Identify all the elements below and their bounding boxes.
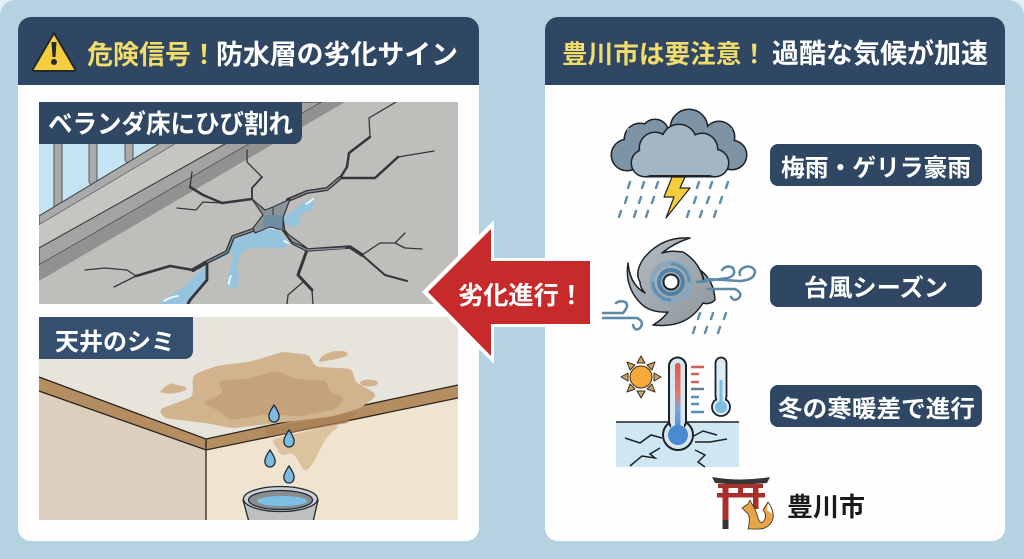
label: ceiling stain: 天井のシミ xyxy=(55,329,175,356)
rain xyxy=(619,182,728,217)
stain xyxy=(158,351,378,473)
illustration: cracked balcony floor xyxy=(39,102,458,304)
label: rainy season xyxy=(770,144,982,186)
panel: Toyokawa climate xyxy=(545,17,1005,541)
heading: Toyokawa climate: 過酷な気候が加速 xyxy=(772,38,988,69)
header bar: Toyokawa climate xyxy=(545,17,1005,85)
label: winter temperature swings xyxy=(770,385,982,427)
crack centre pit xyxy=(252,199,307,248)
scale ticks xyxy=(691,367,704,382)
fox xyxy=(742,500,773,529)
label: Toyokawa city: 豊川市 xyxy=(787,492,865,522)
walls xyxy=(39,391,206,520)
label: typhoon season xyxy=(770,265,982,307)
label: ceiling stain xyxy=(39,317,193,359)
label: cracked balcony floor: ベランダ床にひび割れ xyxy=(48,109,293,139)
large thermometer xyxy=(663,358,693,450)
wind xyxy=(603,266,755,329)
arrow: deterioration progressing: 劣化進行！ xyxy=(458,282,584,310)
header bar: warning signs xyxy=(18,17,479,85)
label: cracked balcony floor xyxy=(39,102,302,144)
ground xyxy=(616,422,739,467)
rain xyxy=(693,313,726,333)
bucket xyxy=(243,486,318,522)
cracks xyxy=(85,102,434,304)
heading: Toyokawa climate xyxy=(562,38,988,69)
icon: thermometer and frost cracks xyxy=(616,356,739,467)
icon: typhoon xyxy=(603,238,755,333)
water drops xyxy=(265,405,294,483)
heading: Toyokawa climate: 豊川市は要注意！ xyxy=(562,41,767,69)
label: winter temperature swings: 冬の寒暖差で進行 xyxy=(778,396,975,423)
sun xyxy=(621,356,661,398)
water seeping xyxy=(158,198,315,304)
front cloud xyxy=(632,125,728,176)
panel: warning signs xyxy=(18,17,479,541)
balusters xyxy=(54,144,134,207)
lightning xyxy=(664,177,690,218)
small thermometer xyxy=(712,358,730,416)
sky behind railing xyxy=(39,144,158,216)
icon: storm cloud xyxy=(612,110,746,218)
illustration: ceiling stain xyxy=(39,317,458,522)
heading: warning signs: 防水層の劣化サイン xyxy=(216,40,458,70)
ground cracks xyxy=(625,431,727,467)
molding xyxy=(39,377,458,450)
arrow: deterioration progressing xyxy=(422,220,594,364)
label: rainy season: 梅雨・ゲリラ豪雨 xyxy=(781,155,971,182)
back cloud xyxy=(612,110,746,170)
icon: warning triangle xyxy=(33,33,75,71)
railing xyxy=(39,144,176,225)
heading: warning signs xyxy=(87,40,458,70)
heading: warning signs: 危険信号！ xyxy=(87,40,217,70)
label: typhoon season: 台風シーズン xyxy=(804,274,948,302)
icon: torii gate and fox xyxy=(712,477,773,529)
